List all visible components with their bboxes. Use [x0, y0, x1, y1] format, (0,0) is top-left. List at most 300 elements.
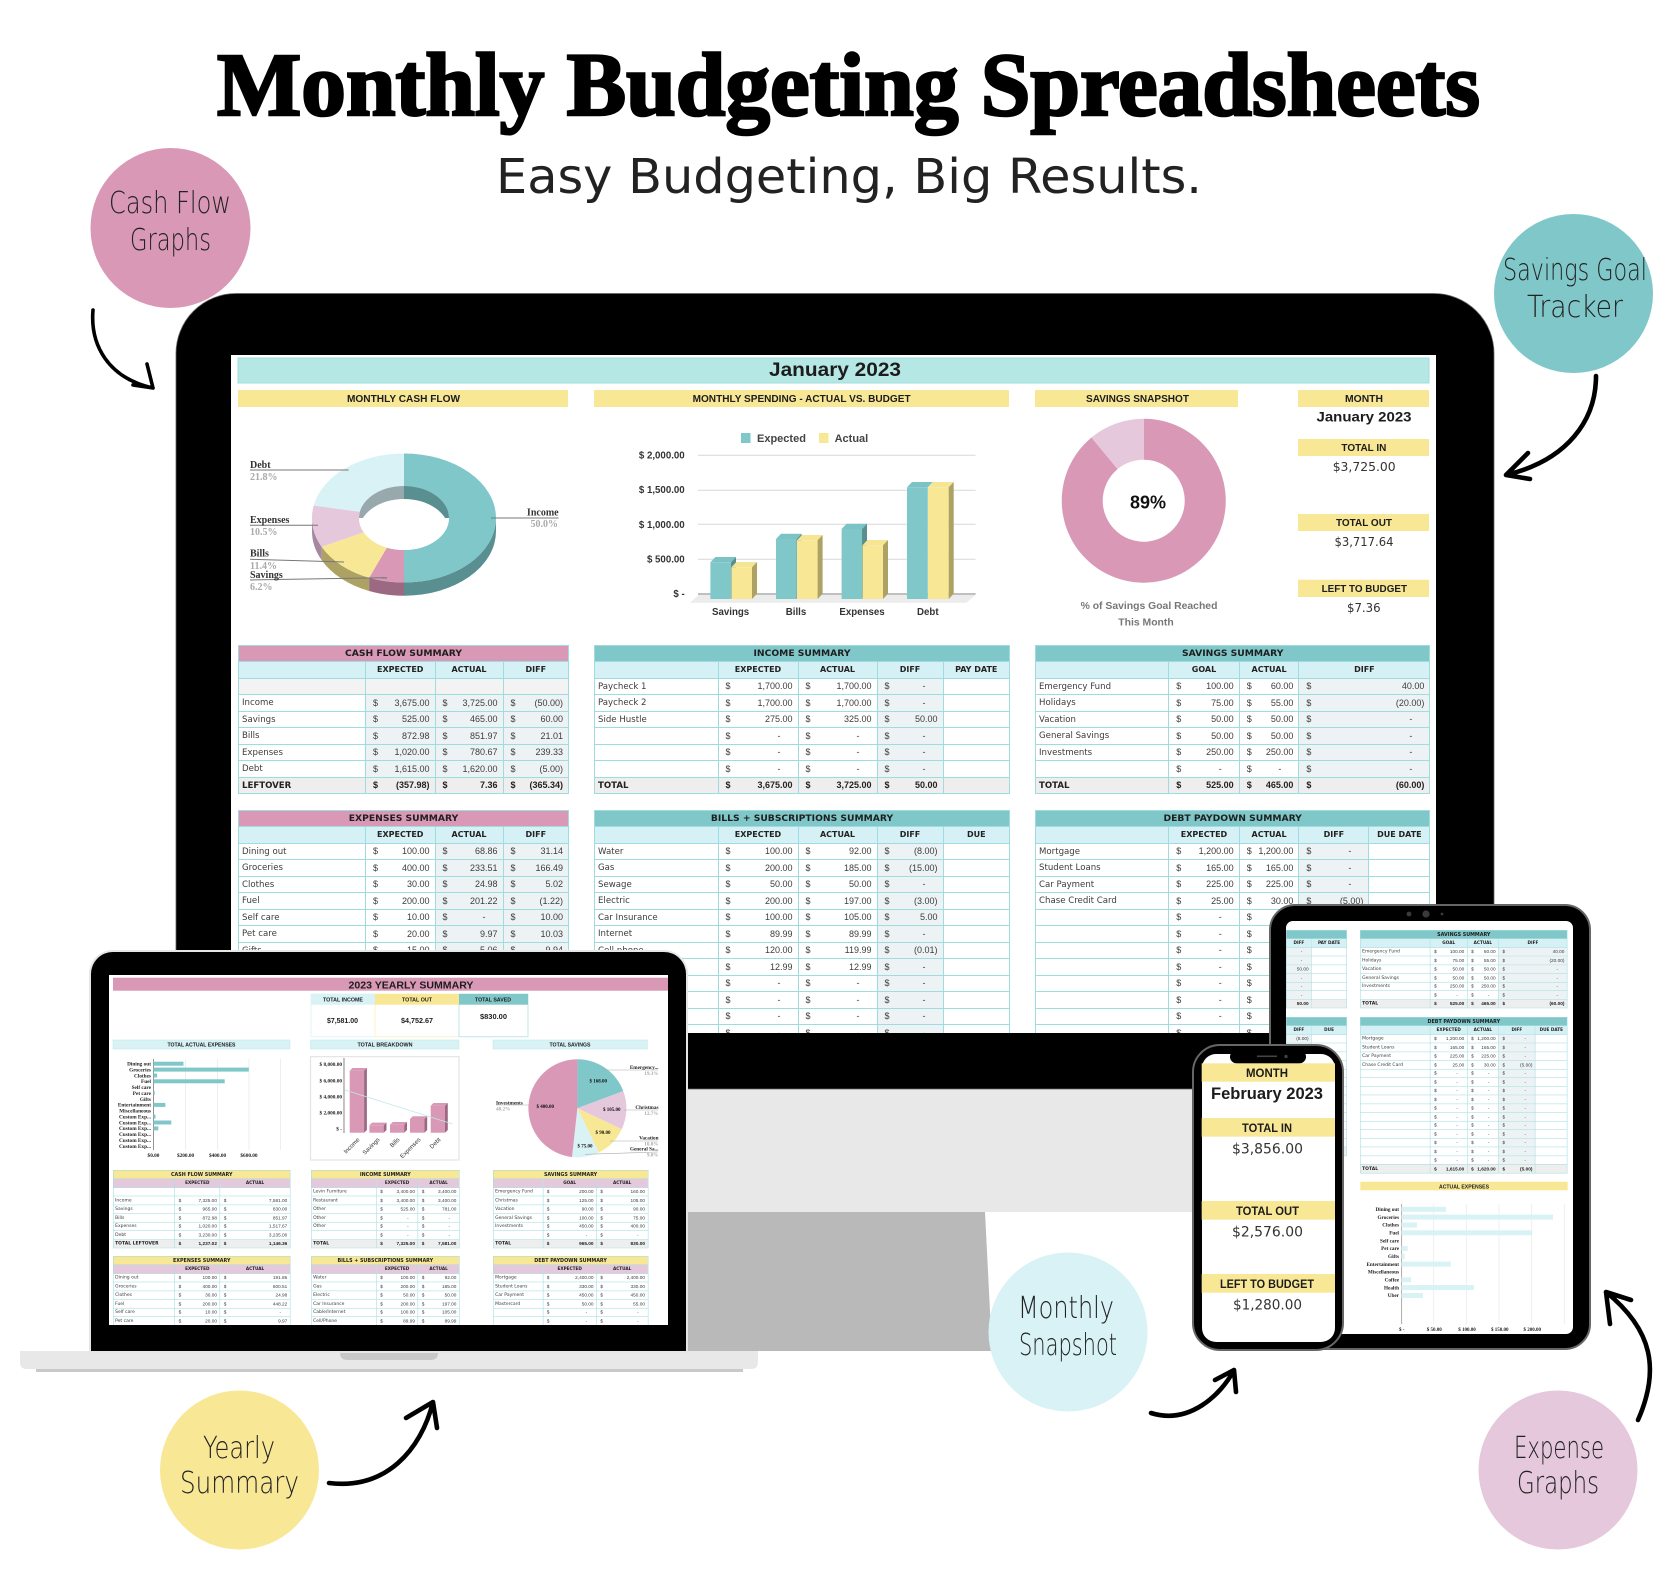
tablet table: debt paydown summary: $ [1503, 1045, 1505, 1050]
tablet table: savings summary: 50.00 [1453, 967, 1465, 972]
heading labels for charts: TOTAL BREAKDOWN [357, 1043, 413, 1049]
tablet table: debt paydown summary: - [1457, 1123, 1458, 1128]
side panel: month totals: LEFT TO BUDGET [1322, 584, 1407, 595]
donut chart: savings snapshot: % of Savings Goal Reached [1081, 601, 1217, 612]
table: income summary: - [778, 764, 780, 774]
table: debt paydown summary: 1,200.00 [1199, 846, 1234, 856]
tablet table: debt paydown summary: $ [1434, 1114, 1437, 1119]
table: savings summary: $ [1306, 714, 1311, 724]
bar chart: total actual expenses: Groceries [129, 1067, 151, 1073]
tablet table: savings summary: $ [1434, 958, 1437, 963]
table: debt paydown summary: $ [1247, 846, 1252, 856]
table: savings summary: $ [1176, 714, 1181, 724]
table: bills and subscriptions summary: (8.00) [914, 846, 938, 856]
table: yearly income summary: $ [380, 1189, 382, 1194]
table: bills and subscriptions summary: Water [598, 846, 623, 856]
table: bills and subscriptions summary: $ [884, 1011, 890, 1021]
table: yearly expenses summary: $ [224, 1293, 226, 1298]
tablet table: debt paydown summary: ACTUAL [1474, 1028, 1492, 1032]
table: yearly cash flow summary: $ [179, 1215, 181, 1220]
table: expenses summary: 10.00 [540, 912, 563, 922]
table: debt paydown summary: $ [1176, 896, 1181, 906]
table: yearly debt summary: $ [600, 1275, 603, 1280]
tablet table: savings summary: $ [1434, 949, 1437, 954]
table: yearly bills summary: $ [421, 1301, 424, 1306]
table: debt paydown summary: $ [1247, 929, 1252, 939]
tablet table: debt paydown summary: $ [1434, 1157, 1437, 1162]
tablet table: savings summary: $ [1503, 1001, 1505, 1006]
table: debt paydown summary: $ [1247, 978, 1252, 988]
table: yearly income summary: Restaurant [313, 1197, 337, 1203]
table: income summary: - [856, 764, 860, 774]
table: yearly savings summary: Vacation [495, 1206, 514, 1211]
tablet table: debt paydown summary: $ [1434, 1149, 1437, 1154]
tablet left table: bills columns: (0.01) [1296, 1088, 1309, 1093]
callout: cash flow graphs [90, 148, 250, 308]
table: cash flow summary: 525.00 [402, 714, 430, 724]
tablet table: debt paydown summary: 1,200.00 [1478, 1036, 1496, 1041]
tablet left table: bills columns: 5.00 [1299, 1071, 1309, 1076]
tablet table: debt paydown summary: $ [1503, 1140, 1505, 1145]
bar chart: total breakdown [310, 1057, 459, 1160]
table: yearly bills summary: $ [421, 1284, 424, 1289]
bar chart: total actual expenses: Custom Exp... [119, 1114, 152, 1120]
table: bills and subscriptions summary: 185.00 [844, 863, 872, 873]
table: expenses summary: 15.00 [407, 945, 430, 955]
bar chart: total actual expenses: Custom Exp... [119, 1144, 152, 1150]
laptop body [91, 952, 686, 1351]
table: income summary: Side Hustle [598, 714, 647, 724]
table: expenses summary: EXPECTED [377, 830, 423, 839]
table: bills and subscriptions summary: DUE [967, 830, 986, 839]
table: yearly bills summary: 89.99 [403, 1319, 414, 1324]
table: expenses summary: 9.94 [546, 945, 563, 955]
tablet table: debt paydown summary: - [1488, 1131, 1490, 1136]
table: yearly bills summary: $ [380, 1293, 382, 1298]
table: cash flow summary: Debt [242, 764, 263, 774]
tablet left table: income columns: - [1301, 984, 1302, 989]
totals boxes: TOTAL SAVED [475, 998, 511, 1004]
table: savings summary: Investments [1039, 748, 1092, 758]
donut chart: monthly cash flow: Debt [250, 460, 271, 471]
table: yearly income summary: 3,400.00 [396, 1189, 414, 1194]
tablet table: debt paydown summary: - [1525, 1071, 1526, 1076]
tablet table: debt paydown summary: $ [1503, 1071, 1505, 1076]
table: yearly expenses summary: $ [224, 1319, 226, 1324]
tablet table: debt paydown summary: - [1525, 1114, 1526, 1119]
table: debt paydown summary: $ [1306, 995, 1311, 1005]
table: cash flow summary: $ [373, 764, 378, 774]
tablet table: debt paydown summary: - [1488, 1079, 1490, 1084]
table: bills and subscriptions summary: 100.00 [765, 846, 792, 856]
table: yearly income summary: Levin Furniture [313, 1189, 346, 1194]
table: yearly income summary: $ [380, 1223, 382, 1228]
table: savings summary: $ [1176, 764, 1181, 774]
table: yearly cash flow summary: $ [224, 1232, 226, 1237]
heading: savings snapshot [1035, 390, 1238, 407]
phone: February 2023 snapshot: $3,856.00 [1232, 1142, 1303, 1158]
tablet left table: bills columns: - [1301, 1140, 1302, 1145]
table: savings summary: $ [1306, 747, 1311, 757]
table: yearly expenses summary: $ [224, 1301, 226, 1306]
table: cash flow summary: Bills [242, 731, 260, 741]
bar chart: total actual expenses: Pet care [133, 1091, 152, 1097]
expense bars: $ - [1399, 1328, 1405, 1333]
table: yearly savings summary: 125.00 [579, 1197, 594, 1202]
tablet table: debt paydown summary: - [1457, 1071, 1458, 1076]
table: cash flow summary: 872.98 [402, 731, 430, 741]
table: bills and subscriptions summary: 5.00 [920, 912, 938, 922]
bar chart: total breakdown: $ - [336, 1125, 342, 1132]
side panel: month totals: $7.36 [1347, 600, 1381, 615]
tablet table: debt paydown summary: $ [1471, 1157, 1474, 1162]
table: bills and subscriptions summary: 50.00 [849, 879, 872, 889]
table: savings summary: $ [1176, 747, 1181, 757]
tablet table: debt paydown summary: $ [1471, 1097, 1474, 1102]
table: savings summary: (60.00) [1396, 780, 1424, 790]
expense bars: Entertainment [1366, 1262, 1399, 1268]
table: yearly savings summary: $ [547, 1223, 549, 1228]
table: bills and subscriptions summary: $ [726, 978, 731, 988]
table: bills and subscriptions summary: - [778, 1011, 780, 1021]
table: cash flow summary: EXPECTED [377, 665, 423, 674]
table: bills and subscriptions summary: (0.01) [914, 945, 938, 955]
tablet left table: income columns: - [1301, 975, 1302, 980]
tablet table: debt paydown summary: 225.00 [1450, 1053, 1465, 1058]
table: yearly cash flow summary: 1,237.02 [199, 1241, 217, 1246]
table: expenses summary: 30.00 [407, 879, 430, 889]
table: bills and subscriptions summary: $ [806, 1011, 811, 1021]
table: debt paydown summary: $ [1176, 945, 1181, 955]
table: savings summary: - [1409, 714, 1412, 724]
tablet table: debt paydown summary: $ [1503, 1149, 1505, 1154]
tablet table: savings summary: SAVINGS SUMMARY [1437, 932, 1491, 938]
table: yearly savings summary: 90.00 [633, 1206, 645, 1211]
table: savings summary: 75.00 [1211, 698, 1234, 708]
tablet left table: bills columns: - [1301, 1114, 1302, 1119]
table: income summary: $ [884, 747, 890, 757]
tablet table: debt paydown summary: $ [1434, 1045, 1437, 1050]
tablet table: debt paydown summary: - [1457, 1157, 1458, 1162]
tablet table: debt paydown summary: $ [1434, 1071, 1437, 1076]
tablet frame [1269, 904, 1591, 1350]
table: yearly cash flow summary: $ [224, 1241, 226, 1246]
table: debt paydown summary: 30.00 [1271, 896, 1293, 906]
table: yearly bills summary: $ [380, 1301, 382, 1306]
tablet left table: bills columns: (15.00) [1294, 1045, 1309, 1050]
tablet table: debt paydown summary: $ [1471, 1062, 1474, 1067]
table: yearly debt summary: Mastercard [495, 1301, 520, 1307]
table: yearly debt summary: 50.00 [582, 1301, 594, 1306]
pie chart: total savings: Emergency... [630, 1065, 659, 1071]
bar chart: total actual expenses: $200.00 [177, 1152, 195, 1159]
table: bills and subscriptions summary: 12.99 [849, 962, 872, 972]
table: yearly bills summary: Car Insurance [313, 1301, 344, 1307]
table: income summary: $ [806, 714, 811, 724]
table: income summary: $ [726, 731, 731, 741]
tablet table: savings summary: $ [1471, 949, 1474, 954]
table: debt paydown summary: - [1219, 929, 1222, 939]
table: income summary: - [922, 747, 926, 757]
donut chart: monthly cash flow: 11.4% [250, 561, 277, 572]
table: yearly expenses summary: 9.97 [278, 1319, 287, 1324]
bar chart: total actual expenses: Custom Exp... [119, 1120, 152, 1126]
table: yearly savings summary: 90.00 [582, 1206, 594, 1211]
table: yearly expenses summary: 200.00 [202, 1301, 217, 1306]
table: income summary: $ [884, 764, 890, 774]
table: expenses summary: $ [373, 896, 378, 906]
table: yearly bills summary: $ [421, 1319, 424, 1324]
table: debt paydown summary: - [1219, 912, 1222, 922]
table: yearly debt summary: $ [547, 1293, 549, 1298]
table: expenses summary: 31.14 [540, 846, 563, 856]
table: expenses summary: $ [442, 929, 448, 939]
table: cash flow summary: Expenses [242, 748, 283, 758]
table: cash flow summary: $ [510, 698, 516, 708]
bar chart: total actual expenses: Entertainment [118, 1103, 151, 1109]
table: debt paydown summary: $ [1306, 896, 1311, 906]
table: yearly income summary: - [407, 1215, 408, 1220]
table: bills and subscriptions summary: $ [806, 863, 811, 873]
table: debt paydown summary: - [1219, 978, 1222, 988]
table: savings summary: $ [1247, 698, 1252, 708]
table: yearly income summary: $ [421, 1223, 424, 1228]
table: yearly cash flow summary: 872.98 [202, 1215, 217, 1220]
bar chart: monthly spending: Expected [757, 433, 806, 445]
table: savings summary: - [1409, 764, 1412, 774]
side panel: month totals: TOTAL IN [1341, 443, 1386, 454]
tablet table: debt paydown summary: - [1525, 1157, 1526, 1162]
table: bills and subscriptions summary: $ [726, 912, 731, 922]
tablet table: savings summary: $ [1503, 958, 1505, 963]
callout: expense graphs: Graphs [1517, 1466, 1599, 1501]
tablet table: debt paydown summary: - [1457, 1140, 1458, 1145]
pie chart: total savings: $ 90.00 [595, 1131, 611, 1136]
table: yearly savings summary: 105.00 [631, 1197, 645, 1202]
table: expenses summary: Pet care [242, 929, 277, 939]
table: debt paydown summary: $ [1306, 879, 1311, 889]
table: yearly cash flow summary: $ [179, 1206, 181, 1211]
table: bills and subscriptions summary: EXPECTED [735, 830, 781, 839]
table: income summary: - [778, 747, 780, 757]
table: bills and subscriptions summary: $ [726, 995, 731, 1005]
table: yearly expenses summary: 20.00 [205, 1319, 217, 1324]
table: cash flow summary: $ [442, 731, 448, 741]
table: yearly debt summary: - [637, 1319, 639, 1324]
table: expenses summary: Gifts [242, 946, 262, 956]
table: yearly cash flow summary: ACTUAL [246, 1180, 264, 1185]
table: income summary: $ [806, 747, 811, 757]
tablet table: debt paydown summary: $ [1503, 1114, 1505, 1119]
phone: February 2023 snapshot: $1,280.00 [1233, 1298, 1302, 1314]
table: income summary: 1,700.00 [836, 698, 872, 708]
table: cash flow summary: $ [510, 714, 516, 724]
table: expenses summary: $ [510, 912, 516, 922]
table: expenses summary: $ [510, 863, 516, 873]
table: cash flow summary: $ [510, 731, 516, 741]
table: savings summary: $ [1306, 698, 1311, 708]
table: yearly bills summary: $ [421, 1310, 424, 1315]
table: cash flow summary: 3,675.00 [394, 698, 430, 708]
table: income summary: - [778, 731, 780, 741]
tablet left table: bills columns: - [1301, 1079, 1302, 1084]
tablet table: savings summary: $ [1503, 967, 1505, 972]
table: bills and subscriptions summary: $ [806, 995, 811, 1005]
table: savings summary: GOAL [1192, 665, 1216, 674]
table: yearly savings summary: - [637, 1232, 639, 1237]
table: yearly cash flow summary: CASH FLOW SUMMARY [171, 1171, 232, 1177]
table: yearly income summary: - [448, 1223, 450, 1228]
tablet table: debt paydown summary: (5.00) [1520, 1166, 1533, 1171]
pie chart: total savings: Vacation [639, 1135, 659, 1141]
table: yearly cash flow summary: 830.00 [273, 1206, 287, 1211]
bar chart: monthly spending: Debt [917, 607, 939, 618]
table: bills and subscriptions summary: $ [726, 929, 731, 939]
table: debt paydown summary: Car Payment [1039, 880, 1094, 890]
table: bills and subscriptions summary: $ [726, 962, 731, 972]
table: expenses summary: $ [510, 929, 516, 939]
table: bills and subscriptions summary: $ [884, 846, 890, 856]
table: yearly income summary: $ [421, 1241, 424, 1246]
table: bills and subscriptions summary: - [856, 995, 860, 1005]
table: yearly income summary: $ [380, 1215, 382, 1220]
table: income summary: 1,700.00 [836, 681, 872, 691]
table: bills and subscriptions summary: $ [884, 896, 890, 906]
table: cash flow summary: $ [442, 698, 448, 708]
table: expenses summary: 100.00 [402, 846, 430, 856]
tablet left table: bills columns: - [1301, 1097, 1302, 1102]
pie chart: total savings: $ 105.00 [603, 1108, 621, 1113]
table: bills and subscriptions summary: 105.00 [844, 912, 872, 922]
pie chart: total savings [496, 1059, 659, 1158]
tablet table: savings summary: ACTUAL [1474, 941, 1492, 946]
table: yearly income summary: $ [421, 1232, 424, 1237]
expense bars: $ 200.00 [1524, 1328, 1542, 1333]
table: savings summary: 40.00 [1402, 681, 1424, 691]
expense bars: $ 150.00 [1491, 1328, 1509, 1333]
table: income summary: $ [884, 714, 890, 724]
table: yearly bills summary: 89.99 [444, 1319, 456, 1324]
table: cash flow summary: $ [373, 731, 378, 741]
table: yearly cash flow summary: 7,581.00 [269, 1197, 287, 1202]
tablet table: savings summary: 465.00 [1481, 1001, 1496, 1006]
table: yearly debt summary: EXPECTED [557, 1267, 582, 1272]
arrow: savings goal tracker to monitor [1506, 376, 1596, 479]
table: bills and subscriptions summary: 197.00 [844, 896, 872, 906]
tablet table: savings summary: GOAL [1443, 941, 1455, 946]
table: debt paydown summary: - [1278, 1011, 1281, 1021]
table: savings summary: 250.00 [1206, 747, 1234, 757]
table: yearly savings summary: $ [600, 1197, 603, 1202]
table: income summary: $ [884, 731, 890, 741]
table: yearly debt summary [493, 1256, 648, 1326]
table: debt paydown summary: - [1348, 1011, 1351, 1021]
table: bills and subscriptions summary: Electric [598, 896, 630, 906]
bar chart: total breakdown: Debt [429, 1137, 443, 1150]
table: savings summary: 60.00 [1271, 681, 1293, 691]
table: yearly cash flow summary: Debt [115, 1232, 126, 1237]
table: bills and subscriptions summary: $ [806, 912, 811, 922]
table: savings summary: 50.00 [1211, 731, 1234, 741]
tablet table: debt paydown summary: - [1457, 1105, 1458, 1110]
pie chart: total savings: 10.8% [644, 1141, 658, 1147]
table: yearly income summary: Other [313, 1223, 325, 1229]
table: debt paydown summary: $ [1176, 978, 1181, 988]
table: bills and subscriptions summary: Sewage [598, 880, 632, 890]
expense bars: $ 100.00 [1458, 1328, 1476, 1333]
table: cash flow summary: $ [373, 714, 378, 724]
table: bills and subscriptions summary: $ [806, 879, 811, 889]
table: yearly savings summary: $ [547, 1189, 549, 1194]
bar chart: total breakdown: Bills [389, 1137, 401, 1149]
tablet table: debt paydown summary: $ [1434, 1088, 1437, 1093]
bar chart: monthly spending: Expenses [839, 607, 885, 618]
table: income summary: 1,700.00 [757, 698, 792, 708]
totals boxes [311, 994, 528, 1037]
tablet table: savings summary: 60.00 [1484, 949, 1496, 954]
expense bars: Groceries [1377, 1215, 1399, 1221]
table: yearly bills summary: 105.00 [441, 1310, 456, 1315]
table: bills and subscriptions summary: 50.00 [770, 879, 792, 889]
table: income summary: - [856, 747, 860, 757]
table: bills and subscriptions summary: - [922, 978, 926, 988]
table: yearly income summary: 3,400.00 [396, 1197, 414, 1202]
table: yearly expenses summary: 24.98 [275, 1293, 287, 1298]
table: bills and subscriptions summary: 120.00 [765, 945, 792, 955]
table: bills and subscriptions summary: Car Insurance [598, 912, 658, 922]
tablet table: debt paydown summary: $ [1471, 1053, 1474, 1058]
table: debt paydown summary: - [1278, 995, 1281, 1005]
table: bills and subscriptions summary: $ [884, 879, 890, 889]
table: yearly savings summary: 200.00 [579, 1189, 594, 1194]
table: yearly savings summary: 160.00 [631, 1189, 645, 1194]
callout: monthly snapshot: Snapshot [1019, 1328, 1117, 1363]
table: bills and subscriptions summary: (3.00) [914, 896, 938, 906]
pie chart: total savings: $ 400.00 [536, 1105, 554, 1110]
table: debt paydown summary: $ [1306, 1011, 1311, 1021]
tablet table: debt paydown summary: - [1525, 1123, 1526, 1128]
bar chart: monthly spending: Savings [712, 607, 749, 618]
tablet table: savings summary: - [1557, 993, 1558, 998]
table: debt paydown summary: 165.00 [1266, 863, 1293, 873]
table: yearly cash flow summary [113, 1170, 290, 1248]
table: cash flow summary: ACTUAL [451, 665, 487, 674]
table: debt paydown summary: EXPECTED [1181, 830, 1227, 839]
table: savings summary [1035, 645, 1430, 794]
table: income summary: 50.00 [915, 714, 938, 724]
table: cash flow summary: $ [442, 747, 448, 757]
table: expenses summary: 5.02 [546, 879, 563, 889]
table: bills and subscriptions summary: $ [806, 945, 811, 955]
tablet table: debt paydown summary: 25.00 [1453, 1062, 1465, 1067]
expense bars: Uber [1388, 1293, 1400, 1299]
tablet left table: bills columns: (3.00) [1296, 1062, 1309, 1067]
table: yearly income summary: 3,400.00 [438, 1197, 456, 1202]
table: yearly savings summary: SAVINGS SUMMARY [544, 1171, 597, 1177]
table: cash flow summary: LEFTOVER [242, 780, 291, 790]
table: debt paydown summary: - [1219, 995, 1222, 1005]
tablet table: debt paydown summary: DEBT PAYDOWN SUMMARY [1428, 1019, 1500, 1024]
table: bills and subscriptions summary: $ [884, 995, 890, 1005]
pie chart: total savings: Christmas [635, 1105, 658, 1111]
table: yearly income summary: $ [380, 1232, 382, 1237]
callout: savings goal tracker [1494, 214, 1653, 373]
table: bills and subscriptions summary: $ [806, 896, 811, 906]
table: bills and subscriptions summary: DIFF [900, 830, 920, 839]
tablet table: debt paydown summary: $ [1434, 1053, 1437, 1058]
table: cash flow summary: Income [242, 698, 274, 708]
table: bills and subscriptions summary: $ [806, 962, 811, 972]
